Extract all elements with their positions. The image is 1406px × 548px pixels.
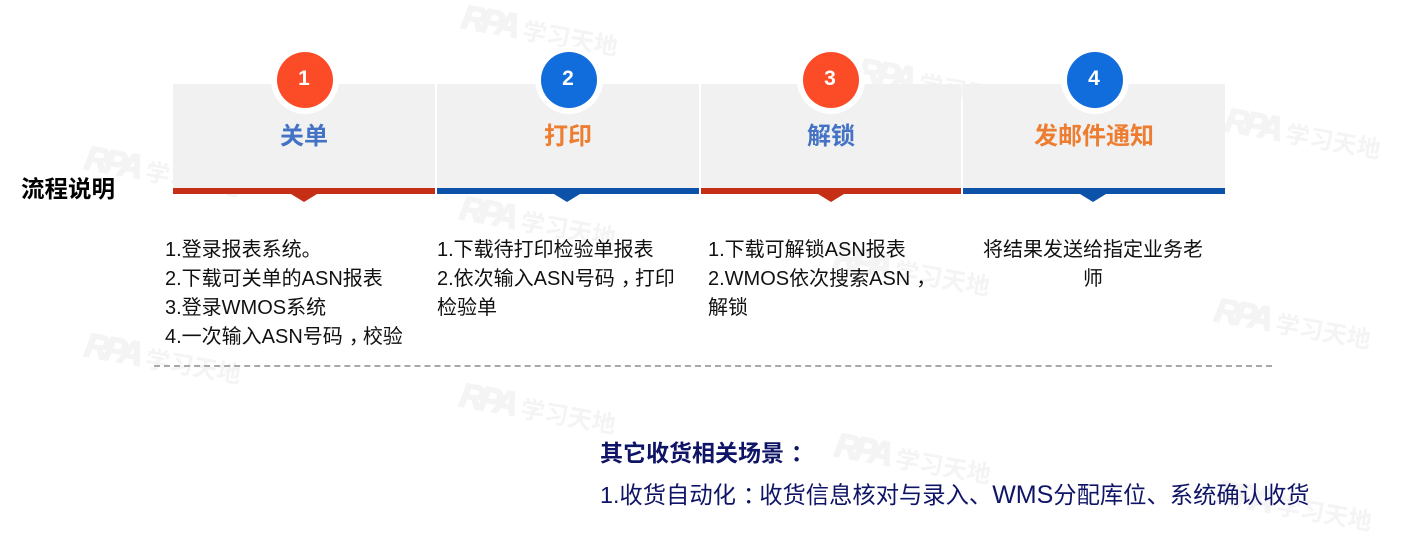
watermarks: RPA学习天地: [82, 139, 243, 202]
text block: step 1: 3.登录WMOS系统: [165, 297, 326, 319]
ring: step 1: [271, 46, 339, 114]
text block: step 1: 4.一次输入ASN号码 校验: [165, 326, 403, 348]
heading: step 3: 解锁: [807, 123, 855, 150]
panel: step 2: [437, 84, 699, 194]
watermarks: RPA学习天地: [831, 238, 992, 301]
ring: step 4: [1061, 46, 1129, 114]
panel: step 4: [963, 84, 1225, 194]
number badge 2: 2: [562, 67, 574, 90]
ring: step 3: [797, 46, 865, 114]
divider: [154, 365, 1272, 367]
panel: step 1: [173, 84, 435, 194]
text block: step 4: 将结果发送给指定业务老: [983, 239, 1203, 261]
number badge 3: 3: [824, 67, 836, 90]
number badge 1: [277, 52, 333, 108]
text block: step 2: 检验单: [437, 297, 497, 319]
watermarks: RPA学习天地: [1212, 291, 1373, 354]
number badge 1: 1: [298, 67, 310, 90]
watermarks: RPA学习天地: [1222, 101, 1383, 164]
watermarks: RPA学习天地: [855, 51, 1016, 114]
other scenarios text: ：: [743, 482, 766, 508]
other scenarios heading: 其它收货相关场景: [600, 440, 784, 466]
watermarks: RPA学习天地: [832, 426, 993, 489]
number badge 4: 4: [1088, 67, 1100, 90]
other scenarios text: 1.收货自动化 收货信息核对与录入、WMS分配库位、系统确认收货: [600, 481, 1310, 509]
text block: step 3: 2.WMOS依次搜索ASN: [708, 268, 910, 290]
text block: step 1: 1.登录报表系统。: [165, 239, 322, 261]
text block: step 2: 1.下载待打印检验单报表: [437, 239, 654, 261]
text block: step 4: [983, 239, 1203, 290]
text block: step 3: 解锁: [708, 297, 748, 319]
pointer: step 2: [554, 194, 580, 202]
side label: process description: 流程说明: [21, 176, 115, 202]
watermarks: RPA学习天地: [457, 189, 618, 252]
text block: step 3: [708, 239, 936, 319]
text block: step 1: ，: [349, 326, 369, 348]
text block: step 2: ，: [621, 268, 641, 290]
pointer: step 3: [818, 194, 844, 202]
heading: step 2: 打印: [544, 123, 592, 150]
heading: step 1: 关单: [280, 123, 328, 150]
text block: step 1: [165, 239, 403, 348]
number badge 2: [541, 52, 597, 108]
text block: step 4: 师: [1083, 268, 1103, 290]
number badge 3: [803, 52, 859, 108]
pointer: step 1: [291, 194, 317, 202]
pointer: step 4: [1080, 194, 1106, 202]
text block: step 1: 2.下载可关单的ASN报表: [165, 268, 383, 290]
panel: step 3: [701, 84, 961, 194]
text block: step 3: ，: [916, 268, 936, 290]
watermarks: RPA学习天地: [1213, 473, 1374, 536]
text block: step 3: 1.下载可解锁ASN报表: [708, 239, 906, 261]
watermarks: RPA学习天地: [457, 376, 618, 439]
other scenarios heading: ：: [791, 440, 814, 466]
text block: step 2: 2.依次输入ASN号码 打印: [437, 268, 675, 290]
text block: step 2: [437, 239, 675, 319]
watermarks: RPA学习天地: [82, 326, 243, 389]
ring: step 2: [535, 46, 603, 114]
number badge 4: [1067, 52, 1123, 108]
heading: step 4: 发邮件通知: [1034, 123, 1154, 150]
watermarks: RPA学习天地: [459, 0, 620, 61]
